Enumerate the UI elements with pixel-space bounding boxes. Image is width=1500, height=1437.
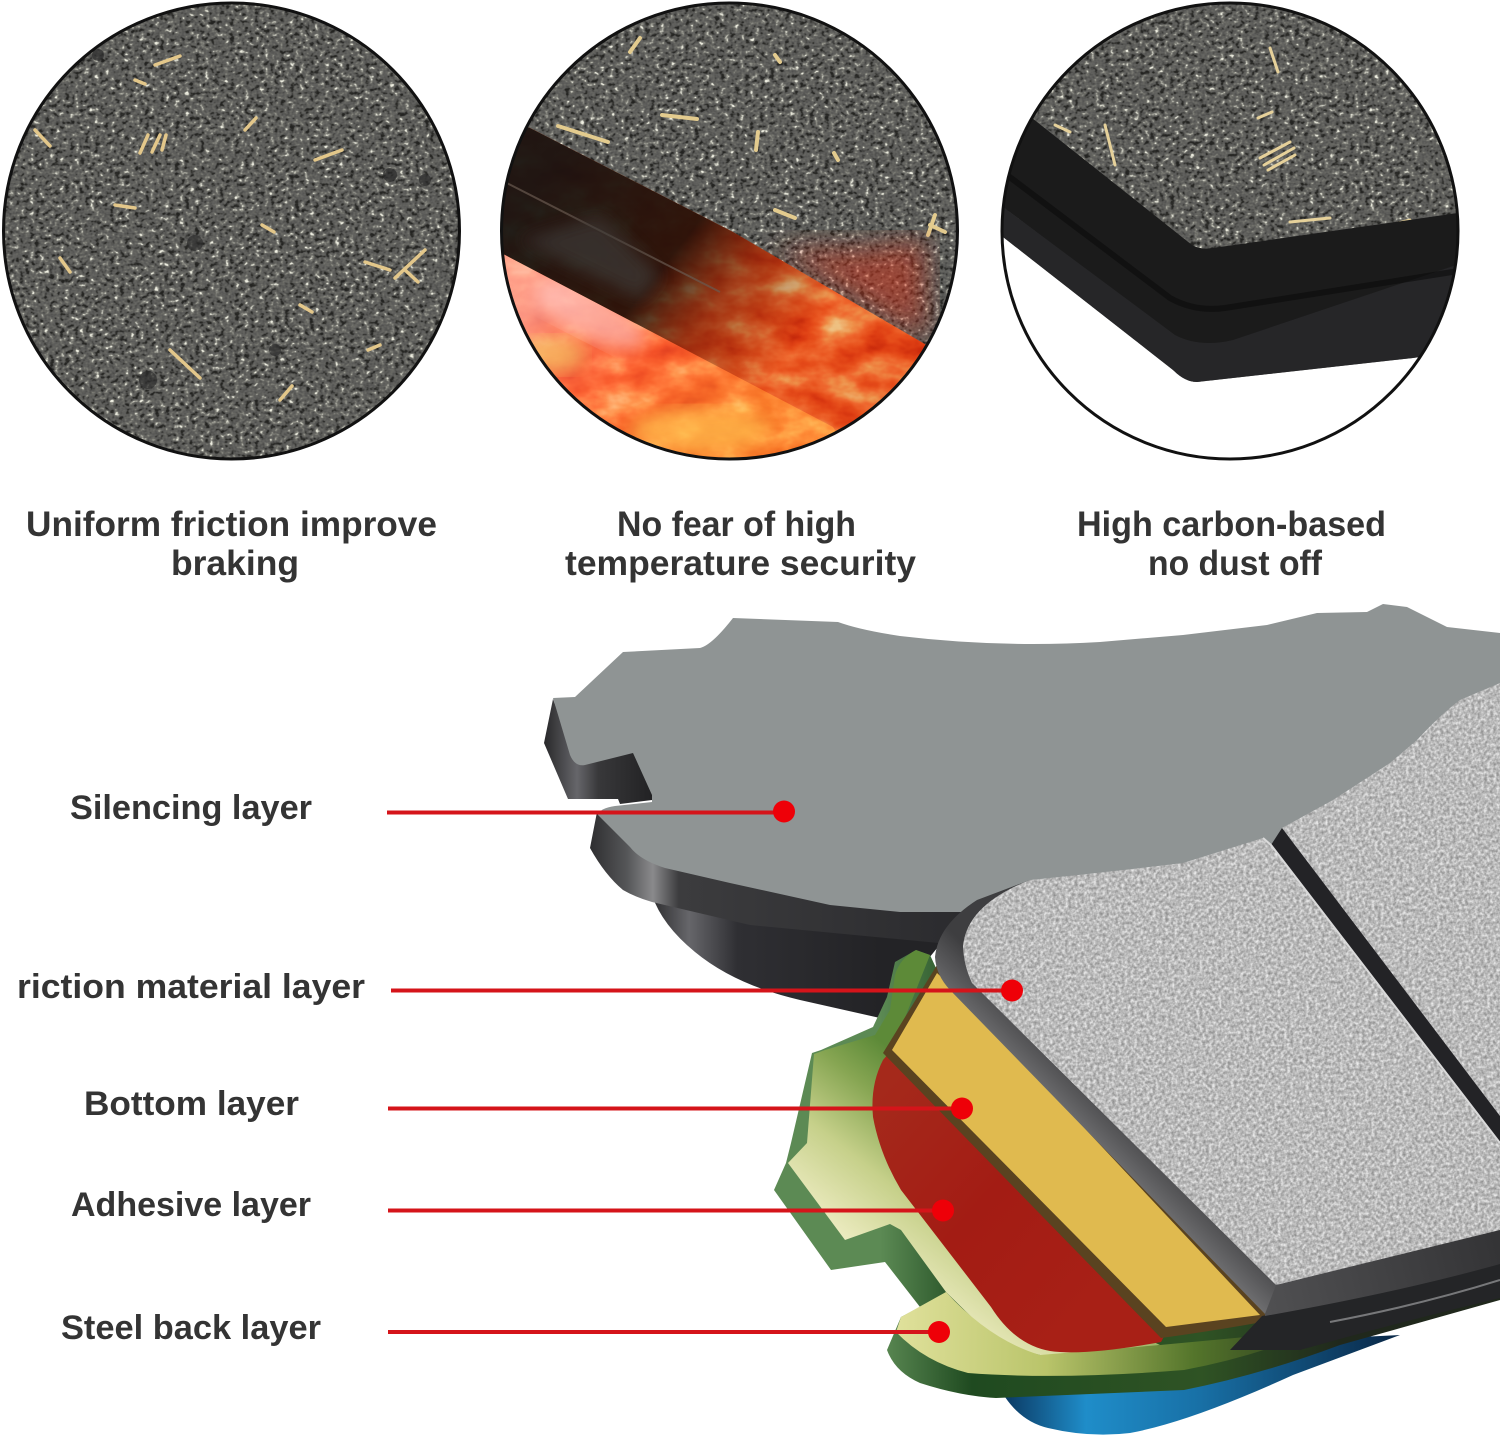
caption 2: temperature security (565, 544, 917, 583)
second friction block (1280, 680, 1500, 1120)
brake pad layered illustration (544, 604, 1500, 1435)
circle: high temperature flames over pad edge (495, 0, 965, 470)
caption 3 (1077, 505, 1386, 583)
black steel strip right (1230, 1262, 1500, 1350)
underside black shim (652, 880, 960, 1018)
bottom yellow layer (892, 973, 1260, 1327)
black pad edge band upper (995, 115, 1465, 345)
pointer: bottom layer (388, 1098, 973, 1120)
fibres: gold flecks (35, 56, 425, 400)
silencing layer surface (553, 604, 1500, 912)
steel back green light lower (896, 1292, 1320, 1376)
label: bottom layer: Bottom layer (84, 1085, 299, 1123)
caption 1: Uniform friction improve (26, 505, 437, 544)
adhesive red layer (872, 1040, 1170, 1352)
pointer: adhesive layer (388, 1200, 954, 1222)
label: friction material layer: riction material layer (17, 968, 365, 1006)
blue backing (1005, 1335, 1400, 1435)
friction block bevel highlight (1263, 838, 1500, 1143)
pointer: silencing layer (387, 800, 795, 822)
caption 3: High carbon-based (1077, 505, 1386, 544)
circle: high carbon edge close-up (1004, 4, 1456, 382)
pointer: steel back layer (388, 1321, 950, 1343)
label: adhesive layer: Adhesive layer (71, 1186, 311, 1224)
circle: uniform friction material texture (0, 0, 464, 464)
block gap black (1271, 828, 1500, 1143)
steel back green dark (774, 950, 1500, 1398)
caption 2: No fear of high (617, 505, 856, 544)
caption 1 (26, 505, 437, 583)
pointer: friction material layer (391, 980, 1023, 1002)
grey bevel edge (935, 880, 1280, 1314)
label: silencing layer: Silencing layer (70, 789, 312, 827)
fibres: gold flecks (1055, 48, 1410, 228)
white below pad (1004, 238, 1418, 458)
circle outline 1 (4, 3, 460, 459)
brown underlayer (883, 965, 1290, 1338)
flame band (503, 128, 926, 431)
dark blotches (92, 49, 431, 389)
fibres: gold flecks (558, 38, 945, 235)
caption 3: no dust off (1148, 544, 1322, 583)
friction material block (960, 835, 1500, 1290)
circle outline 3 (1002, 3, 1458, 459)
crease shadow (1003, 172, 1465, 309)
plate side black (590, 812, 985, 945)
caption 2 (565, 505, 917, 583)
circle outline 2 (502, 3, 958, 459)
black pad edge band lower (995, 207, 1465, 382)
steel back green light upper (788, 950, 1160, 1360)
caption 1: braking (171, 544, 299, 583)
label: steel back layer: Steel back layer (61, 1309, 321, 1347)
lower grey edge (1265, 1228, 1500, 1316)
red heat haze on material (775, 240, 925, 340)
tab side black (544, 699, 652, 804)
bright flame area (504, 254, 836, 458)
